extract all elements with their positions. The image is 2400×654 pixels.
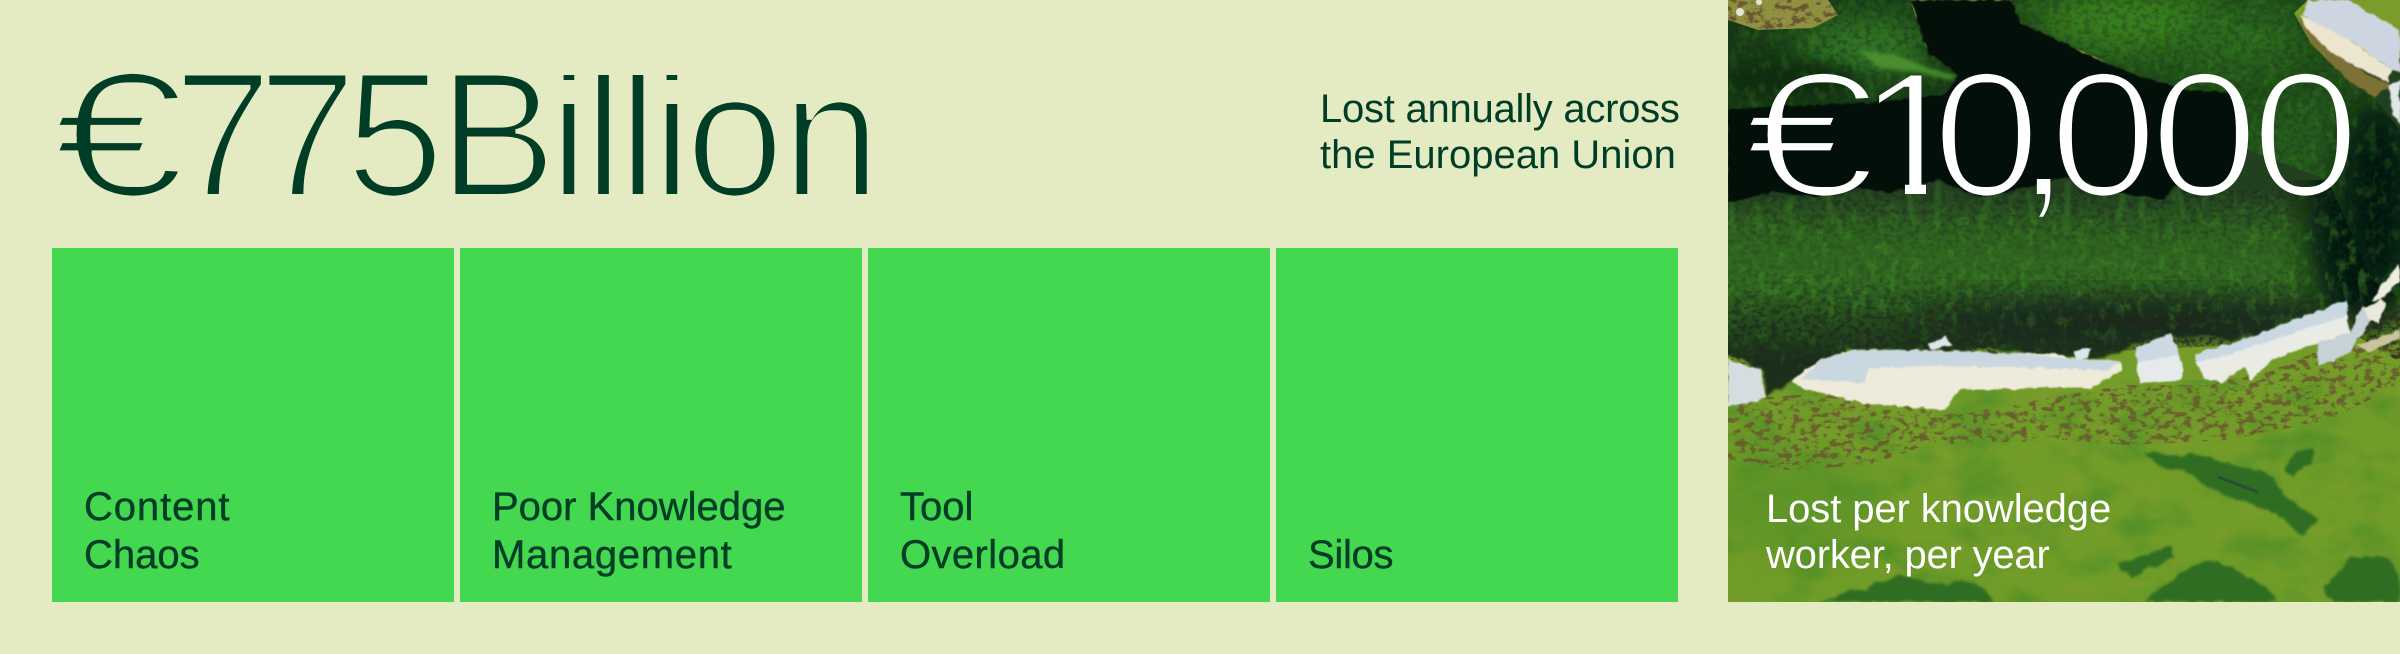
panel: Tool Overload: Overload: [900, 533, 1066, 577]
panel: Poor Knowledge Management: Management: [492, 533, 732, 577]
value: €10,000: [1750, 74, 2350, 217]
caption: lost per knowledge worker: worker, per year: [1765, 533, 2050, 577]
caption: lost per knowledge worker: Lost per knowledge: [1766, 487, 2111, 531]
panel: Content Chaos: Content: [84, 485, 230, 529]
value: €10,000: 1: [1858, 35, 1966, 234]
panel: Silos: Silos: [1308, 533, 1393, 577]
top-left forest: [1728, 0, 1958, 110]
top-right snow outcrop: [2294, 0, 2400, 125]
text block: lost annually across the European Union: Lost annually across: [1320, 87, 1680, 131]
value: €10,000: 0,000: [1932, 35, 2359, 234]
panel: Poor Knowledge Management: Poor Knowledge: [492, 485, 786, 529]
panel: Content Chaos: Chaos: [84, 533, 200, 577]
panel: Content Chaos: [52, 248, 454, 602]
panel: Poor Knowledge Management: [460, 248, 862, 602]
top-left island: [1728, 0, 1838, 30]
heading: €775Billion: €: [52, 36, 187, 235]
caption: lost per knowledge worker: [1765, 487, 2111, 577]
forest band: [1718, 60, 2400, 397]
panel: Silos: [1276, 248, 1678, 602]
panel: Tool Overload: Tool: [900, 485, 973, 529]
heading: €775Billion: Billion: [438, 35, 881, 234]
heading: €775Billion: [60, 74, 867, 196]
text block: lost annually across the European Union: the European Union: [1320, 133, 1676, 177]
aerial terrain image: [1728, 0, 2400, 602]
panel: €10,000 over terrain image: [1698, 0, 2400, 602]
snow band: [1728, 263, 2400, 410]
upper mound: [2011, 0, 2400, 300]
value: €10,000: €: [1743, 36, 1878, 235]
dark water: [1728, 0, 2247, 203]
panel: Tool Overload: [868, 248, 1270, 602]
heading: €775Billion: 775: [173, 35, 444, 234]
text block: lost annually across the European Union: [1320, 87, 1680, 177]
